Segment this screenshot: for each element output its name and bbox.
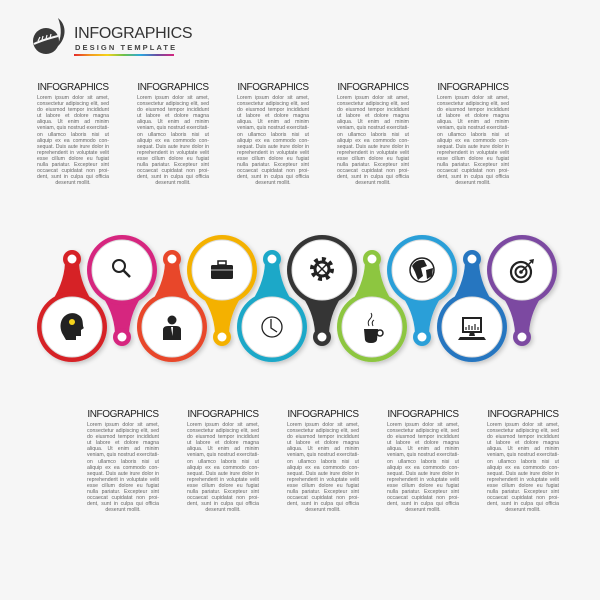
text block 9: deserunt mollit. [405,507,441,513]
bottom text columns [87,409,559,513]
text block 1: veniam, quis nostrud exercitati- [37,125,109,131]
text block 2: reprehenderit in voluptate velit [137,150,209,156]
text block 2: nulla pariatur. Excepteur sint [137,162,209,168]
text block 3: esse cillum dolore eu fugiat [237,156,309,162]
text block 6: on ullamco laboris nisi ut [87,459,159,465]
text block 9 [387,409,459,513]
text block 9: nulla pariatur. Excepteur sint [387,489,459,495]
text block 6: nulla pariatur. Excepteur sint [87,489,159,495]
text block 9: veniam, quis nostrud exercitati- [387,452,459,458]
text block 4: aliqua. Ut enim ad minim [337,119,409,125]
text block 9: dent, sunt in culpa qui officia [387,501,459,507]
text block 7: on ullamco laboris nisi ut [187,459,259,465]
text block 1: on ullamco laboris nisi ut [37,132,109,138]
text block 6: veniam, quis nostrud exercitati- [87,452,159,458]
step 1: red bulb head [37,250,107,362]
text block 7: deserunt mollit. [205,507,241,513]
text block 6: consectetur adipiscing elit, sed [87,428,159,434]
text block 4: ut labore et dolore magna [337,113,409,119]
text block 4: dent, sunt in culpa qui officia [337,174,409,180]
step 8: blue globe [387,235,457,346]
text block 7: esse cillum dolore eu fugiat [187,483,259,489]
text block 5: aliquip ex ea commodo con- [437,138,509,144]
text block 4: occaecat cupidatat non proi- [337,168,409,174]
text block 10: Lorem ipsum dolor sit amet, [487,422,559,428]
text block 4 [337,82,409,186]
text block 3: aliqua. Ut enim ad minim [237,119,309,125]
text block 2: deserunt mollit. [155,180,191,186]
text block 10: esse cillum dolore eu fugiat [487,483,559,489]
text block 3: INFOGRAPHICS [237,82,309,93]
text block 1: Lorem ipsum dolor sit amet, [37,95,109,101]
text block 9: on ullamco laboris nisi ut [387,459,459,465]
text block 3: ut labore et dolore magna [237,113,309,119]
text block 6: esse cillum dolore eu fugiat [87,483,159,489]
text block 2: Lorem ipsum dolor sit amet, [137,95,209,101]
text block 3 [237,82,309,186]
icon: logo mark [33,18,65,54]
text block 8: nulla pariatur. Excepteur sint [287,489,359,495]
step 4: yellow briefcase [187,235,257,346]
text block 6: reprehenderit in voluptate velit [87,477,159,483]
text block 2: occaecat cupidatat non proi- [137,168,209,174]
text block 2: consectetur adipiscing elit, sed [137,101,209,107]
text block 10: ut labore et dolore magna [487,440,559,446]
text block 8: sequat. Duis aute irure dolor in [287,471,359,477]
step 6: dark gear [287,235,357,346]
text block 10: dent, sunt in culpa qui officia [487,501,559,507]
text block 2: do eiusmod tempor incididunt [137,107,209,113]
text block 2: ut labore et dolore magna [137,113,209,119]
text block 9: Lorem ipsum dolor sit amet, [387,422,459,428]
step 10: purple target [487,235,557,346]
text block 5: deserunt mollit. [455,180,491,186]
text block 9: do eiusmod tempor incididunt [387,434,459,440]
text block 1: aliquip ex ea commodo con- [37,138,109,144]
text block 5: veniam, quis nostrud exercitati- [437,125,509,131]
text block 9: occaecat cupidatat non proi- [387,495,459,501]
text block 1: sequat. Duis aute irure dolor in [37,144,109,150]
text block 9: aliquip ex ea commodo con- [387,465,459,471]
text block 4: consectetur adipiscing elit, sed [337,101,409,107]
text block 2: INFOGRAPHICS [137,82,209,93]
text block 3: occaecat cupidatat non proi- [237,168,309,174]
step 9: blue monitor [437,250,507,362]
text block 10: sequat. Duis aute irure dolor in [487,471,559,477]
text block 1: aliqua. Ut enim ad minim [37,119,109,125]
text block 8: do eiusmod tempor incididunt [287,434,359,440]
text block 1: INFOGRAPHICS [37,82,109,93]
text block 7: sequat. Duis aute irure dolor in [187,471,259,477]
text block 6: deserunt mollit. [105,507,141,513]
text block 8: veniam, quis nostrud exercitati- [287,452,359,458]
text block 8: aliquip ex ea commodo con- [287,465,359,471]
text block 6: Lorem ipsum dolor sit amet, [87,422,159,428]
text block 4: INFOGRAPHICS [337,82,409,93]
text block 4: on ullamco laboris nisi ut [337,132,409,138]
text block 2: on ullamco laboris nisi ut [137,132,209,138]
text block 5: reprehenderit in voluptate velit [437,150,509,156]
text block 7: occaecat cupidatat non proi- [187,495,259,501]
text block 10: aliqua. Ut enim ad minim [487,446,559,452]
text block 8: esse cillum dolore eu fugiat [287,483,359,489]
text block 4: veniam, quis nostrud exercitati- [337,125,409,131]
text block 5: INFOGRAPHICS [437,82,509,93]
text block 1: ut labore et dolore magna [37,113,109,119]
text block 8: consectetur adipiscing elit, sed [287,428,359,434]
text block 1: reprehenderit in voluptate velit [37,150,109,156]
text block 5: consectetur adipiscing elit, sed [437,101,509,107]
text block 4: sequat. Duis aute irure dolor in [337,144,409,150]
text block 5: aliqua. Ut enim ad minim [437,119,509,125]
text block 8: aliqua. Ut enim ad minim [287,446,359,452]
text block 4: nulla pariatur. Excepteur sint [337,162,409,168]
text block 5: esse cillum dolore eu fugiat [437,156,509,162]
logo [33,18,192,56]
text block 4: Lorem ipsum dolor sit amet, [337,95,409,101]
text block 10: INFOGRAPHICS [487,409,559,420]
logo: DESIGN TEMPLATE [75,43,177,52]
text block 8: reprehenderit in voluptate velit [287,477,359,483]
text block 2: aliquip ex ea commodo con- [137,138,209,144]
text block 7: aliqua. Ut enim ad minim [187,446,259,452]
text block 9: reprehenderit in voluptate velit [387,477,459,483]
text block 8: occaecat cupidatat non proi- [287,495,359,501]
text block 7: ut labore et dolore magna [187,440,259,446]
text block 3: consectetur adipiscing elit, sed [237,101,309,107]
logo text: INFOGRAPHICS [74,25,192,42]
text block 9: ut labore et dolore magna [387,440,459,446]
text block 4: aliquip ex ea commodo con- [337,138,409,144]
text block 3: veniam, quis nostrud exercitati- [237,125,309,131]
text block 1: do eiusmod tempor incididunt [37,107,109,113]
text block 7 [187,409,259,513]
text block 6: do eiusmod tempor incididunt [87,434,159,440]
text block 3: dent, sunt in culpa qui officia [237,174,309,180]
text block 6: ut labore et dolore magna [87,440,159,446]
text block 5: on ullamco laboris nisi ut [437,132,509,138]
text block 7: aliquip ex ea commodo con- [187,465,259,471]
text block 8: Lorem ipsum dolor sit amet, [287,422,359,428]
text block 3: aliquip ex ea commodo con- [237,138,309,144]
text block 6: sequat. Duis aute irure dolor in [87,471,159,477]
text block 5: occaecat cupidatat non proi- [437,168,509,174]
text block 8 [287,409,359,513]
text block 5: do eiusmod tempor incididunt [437,107,509,113]
text block 9: sequat. Duis aute irure dolor in [387,471,459,477]
text block 6: dent, sunt in culpa qui officia [87,501,159,507]
text block 6: aliqua. Ut enim ad minim [87,446,159,452]
text block 10: veniam, quis nostrud exercitati- [487,452,559,458]
text block 10: reprehenderit in voluptate velit [487,477,559,483]
text block 9: consectetur adipiscing elit, sed [387,428,459,434]
text block 1: deserunt mollit. [55,180,91,186]
text block 7: dent, sunt in culpa qui officia [187,501,259,507]
text block 8: on ullamco laboris nisi ut [287,459,359,465]
text block 10: on ullamco laboris nisi ut [487,459,559,465]
text block 10: deserunt mollit. [505,507,541,513]
text block 3: Lorem ipsum dolor sit amet, [237,95,309,101]
text block 10: consectetur adipiscing elit, sed [487,428,559,434]
text block 4: deserunt mollit. [355,180,391,186]
step 7: green coffee [337,250,407,362]
text block 2: veniam, quis nostrud exercitati- [137,125,209,131]
text block 8: INFOGRAPHICS [287,409,359,420]
text block 7: do eiusmod tempor incididunt [187,434,259,440]
text block 10: occaecat cupidatat non proi- [487,495,559,501]
step 3: orange person [137,250,207,362]
text block 6: occaecat cupidatat non proi- [87,495,159,501]
step 5: cyan clock [237,250,307,362]
text block 7: Lorem ipsum dolor sit amet, [187,422,259,428]
text block 7: consectetur adipiscing elit, sed [187,428,259,434]
text block 1: occaecat cupidatat non proi- [37,168,109,174]
text block 4: do eiusmod tempor incididunt [337,107,409,113]
text block 4: reprehenderit in voluptate velit [337,150,409,156]
text block 9: INFOGRAPHICS [387,409,459,420]
text block 5: sequat. Duis aute irure dolor in [437,144,509,150]
text block 3: deserunt mollit. [255,180,291,186]
text block 3: reprehenderit in voluptate velit [237,150,309,156]
text block 10: nulla pariatur. Excepteur sint [487,489,559,495]
text block 6: INFOGRAPHICS [87,409,159,420]
text block 1: consectetur adipiscing elit, sed [37,101,109,107]
text block 9: aliqua. Ut enim ad minim [387,446,459,452]
text block 1: esse cillum dolore eu fugiat [37,156,109,162]
text block 2: sequat. Duis aute irure dolor in [137,144,209,150]
step 2: magenta search [87,235,157,346]
text block 8: ut labore et dolore magna [287,440,359,446]
text block 5: Lorem ipsum dolor sit amet, [437,95,509,101]
text block 2: aliqua. Ut enim ad minim [137,119,209,125]
top text columns [37,82,509,186]
text block 3: do eiusmod tempor incididunt [237,107,309,113]
text block 1 [37,82,109,186]
text block 4: esse cillum dolore eu fugiat [337,156,409,162]
text block 7: nulla pariatur. Excepteur sint [187,489,259,495]
text block 3: on ullamco laboris nisi ut [237,132,309,138]
text block 10: aliquip ex ea commodo con- [487,465,559,471]
text block 2 [137,82,209,186]
text block 2: esse cillum dolore eu fugiat [137,156,209,162]
text block 8: deserunt mollit. [305,507,341,513]
text block 5: nulla pariatur. Excepteur sint [437,162,509,168]
text block 1: nulla pariatur. Excepteur sint [37,162,109,168]
text block 9: esse cillum dolore eu fugiat [387,483,459,489]
text block 7: INFOGRAPHICS [187,409,259,420]
text block 5 [437,82,509,186]
text block 5: ut labore et dolore magna [437,113,509,119]
text block 10 [487,409,559,513]
text block 2: dent, sunt in culpa qui officia [137,174,209,180]
text block 1: dent, sunt in culpa qui officia [37,174,109,180]
text block 10: do eiusmod tempor incididunt [487,434,559,440]
text block 7: veniam, quis nostrud exercitati- [187,452,259,458]
text block 3: nulla pariatur. Excepteur sint [237,162,309,168]
text block 3: sequat. Duis aute irure dolor in [237,144,309,150]
text block 5: dent, sunt in culpa qui officia [437,174,509,180]
text block 6 [87,409,159,513]
text block 8: dent, sunt in culpa qui officia [287,501,359,507]
text block 6: aliquip ex ea commodo con- [87,465,159,471]
text block 7: reprehenderit in voluptate velit [187,477,259,483]
